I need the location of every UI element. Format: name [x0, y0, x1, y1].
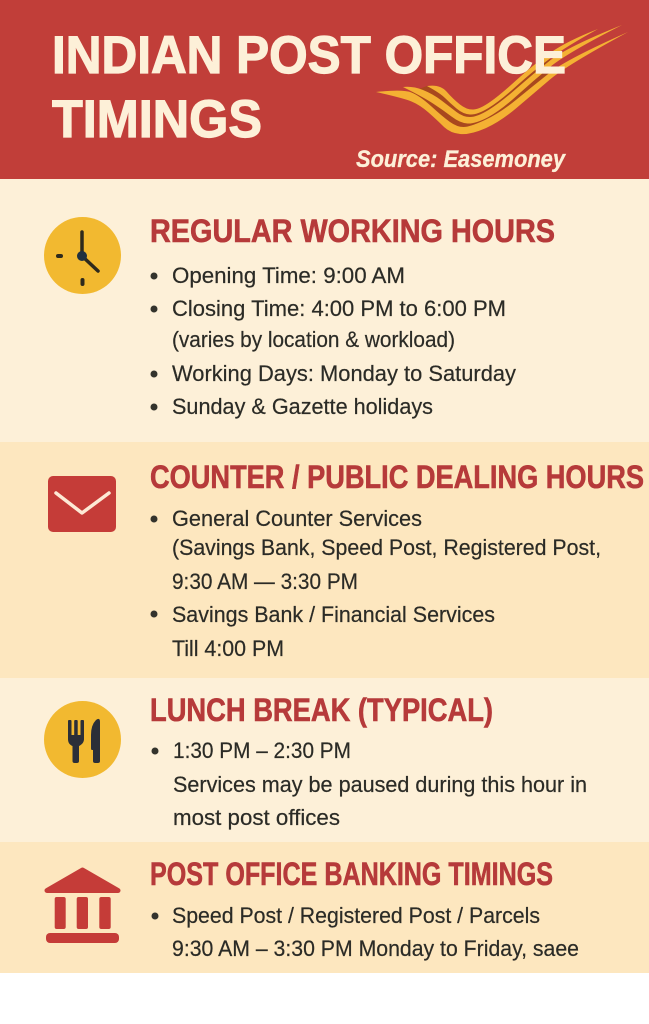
heading: LUNCH BREAK (TYPICAL) [150, 692, 493, 728]
bullet list [152, 903, 579, 961]
bullet list: Sunday & Gazette holidays [172, 394, 433, 419]
bullet list: Opening Time: 9:00 AM [172, 263, 405, 288]
title: TIMINGS [52, 90, 262, 149]
bullet list: 9:30 AM — 3:30 PM [172, 569, 358, 594]
panel: counter and public dealing hours [0, 442, 649, 678]
icon: envelope [48, 476, 116, 532]
panel: post office banking timings [0, 842, 649, 973]
bullet list: Till 4:00 PM [172, 636, 284, 661]
icon: fork and knife [44, 701, 121, 778]
heading: REGULAR WORKING HOURS [150, 213, 555, 249]
bullet list: Services may be paused during this hour in [173, 772, 587, 797]
bullet list [150, 506, 601, 661]
icon: clock [44, 217, 121, 294]
icon: bank building [46, 870, 119, 943]
panel: lunch break [0, 678, 649, 842]
bullet list: General Counter Services [172, 506, 422, 531]
bullet list: 1:30 PM – 2:30 PM [173, 738, 351, 763]
bullet list: (varies by location & workload) [172, 327, 455, 352]
bullet list: most post offices [173, 805, 340, 830]
bullet list [150, 263, 516, 419]
header banner [0, 0, 649, 179]
heading: POST OFFICE BANKING TIMINGS [150, 856, 553, 892]
title: INDIAN POST OFFICE [52, 26, 566, 85]
bullet list: Working Days: Monday to Saturday [172, 361, 516, 386]
title [52, 26, 566, 149]
source credit: Source: Easemoney [356, 146, 566, 173]
bullet list: 9:30 AM – 3:30 PM Monday to Friday, saee [172, 936, 579, 961]
bullet list: Closing Time: 4:00 PM to 6:00 PM [172, 296, 506, 321]
bullet list: Speed Post / Registered Post / Parcels [172, 903, 540, 928]
bullet list: (Savings Bank, Speed Post, Registered Post, [172, 535, 601, 560]
panel: regular working hours [0, 179, 649, 442]
bullet list [152, 738, 587, 830]
bullet list: Savings Bank / Financial Services [172, 602, 495, 627]
icon: India Post logo [376, 25, 628, 134]
